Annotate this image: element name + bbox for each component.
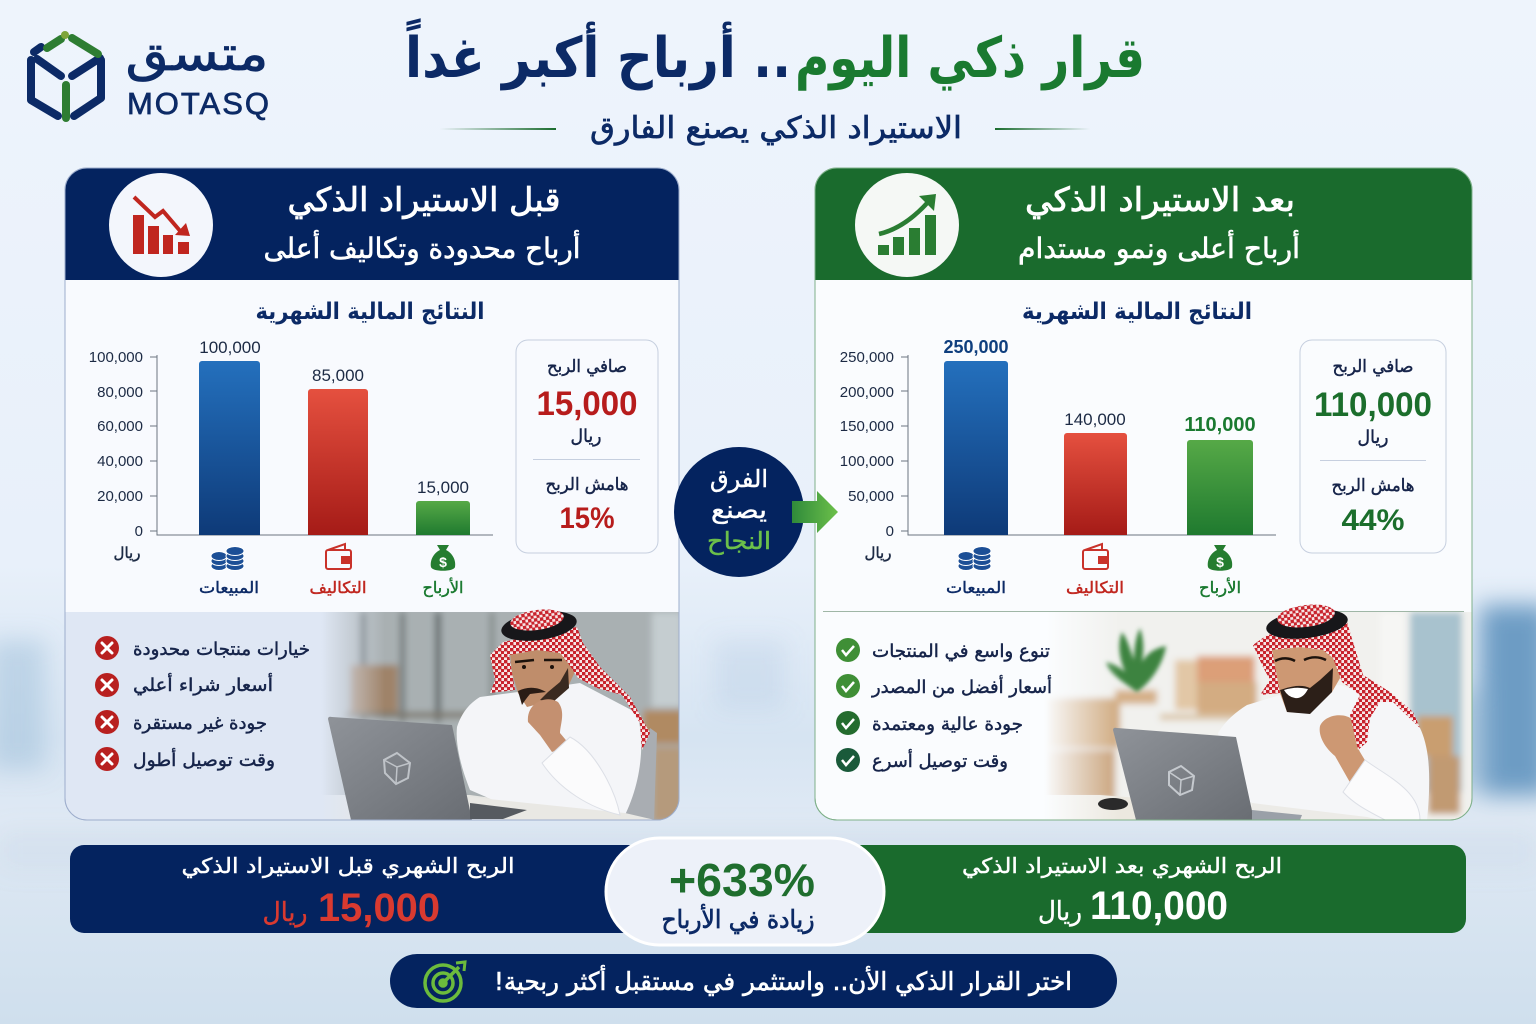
bar chart: before: 85,000 (312, 366, 364, 385)
bar chart: before: 100,000 (89, 349, 143, 366)
bar chart: before: التكاليف (310, 578, 366, 597)
callout: difference makes success (674, 447, 804, 577)
icon: money bag (431, 545, 455, 571)
item (95, 747, 275, 771)
item (836, 748, 1008, 772)
chart heading: النتائج المالية الشهرية (256, 299, 484, 325)
item: خيارات منتجات محدودة (133, 639, 310, 660)
icon: money bag (1208, 545, 1232, 571)
item (836, 711, 1023, 735)
logo (31, 26, 269, 121)
bar chart: after: 100,000 (840, 453, 894, 470)
header subtitle: أرباح أعلى ونمو مستدام (1018, 229, 1300, 265)
metric card: after: 44% (1342, 504, 1404, 537)
callout: profit increase: زيادة في الأرباح (662, 903, 814, 934)
metric card: before: ريال (570, 426, 602, 447)
chart heading: النتائج المالية الشهرية (1022, 299, 1252, 325)
callout: difference makes success: يصنع (711, 496, 767, 524)
logo wordmark arabic: متسق (126, 26, 268, 82)
bar chart: after: 150,000 (840, 418, 894, 435)
icon: money bag: $ (439, 554, 447, 570)
bar chart: before: 60,000 (97, 418, 143, 435)
bar chart: after: 50,000 (848, 488, 894, 505)
bar chart: after (840, 337, 1276, 598)
callout: difference makes success: الفرق (710, 465, 768, 493)
metric card: after: ريال (1358, 427, 1388, 448)
bar chart: after: 140,000 (1064, 410, 1126, 429)
panel: before (65, 168, 685, 826)
icon: wallet (1083, 544, 1108, 569)
bar chart: before: 40,000 (97, 453, 143, 470)
bar chart: after: ريال (865, 544, 891, 562)
icon: wallet (326, 544, 351, 569)
icon: cube logo (31, 31, 101, 118)
bar chart: after: المبيعات (946, 578, 1006, 597)
callout: profit increase: +633% (669, 854, 815, 906)
bottom bar: profit after: الربح الشهري بعد الاستيراد الذكي (962, 854, 1282, 878)
item (95, 673, 273, 697)
bar chart: before: 15,000 (417, 478, 469, 497)
item: جودة غير مستقرة (133, 713, 267, 734)
metric card: before: 15% (560, 502, 614, 535)
bottom bar: profit after: 110,000 (1090, 884, 1228, 928)
item: تنوع واسع في المنتجات (872, 641, 1050, 662)
bar chart: after: الأرباح (1199, 577, 1241, 598)
callout: difference makes success: النجاح (707, 527, 771, 555)
metric card: after: صافي الربح (1332, 357, 1414, 377)
bar chart: after: 250,000 (943, 337, 1009, 357)
panel bottom: office backdrop (65, 606, 685, 826)
header title: قبل الاستيراد الذكي (288, 180, 560, 219)
icon: coins (958, 546, 991, 570)
bar chart: before: الأرباح (422, 577, 464, 598)
bar chart: after: 250,000 (840, 349, 894, 366)
subtitle: الاستيراد الذكي يصنع الفارق (590, 111, 962, 146)
bar chart: before: 100,000 (199, 338, 261, 357)
bottom bar: profit before: 15,000 (318, 886, 440, 930)
title (405, 18, 1145, 91)
logo wordmark latin: MOTASQ (127, 86, 269, 121)
metric card: before: صافي الربح (547, 357, 627, 377)
icon: money bag: $ (1216, 554, 1224, 570)
item: جودة عالية ومعتمدة (872, 714, 1023, 735)
item: وقت توصيل أطول (133, 748, 275, 771)
call to action text: اختر القرار الذكي الأن.. واستثمر في مستقبل أكثر ربحية! (494, 964, 1072, 997)
item: أسعار شراء أعلي (133, 673, 273, 696)
metric card: after: هامش الربح (1332, 476, 1414, 496)
bar chart: after: 0 (886, 523, 894, 540)
metric card: after (1300, 340, 1446, 553)
arrow (792, 491, 838, 533)
metric card: before (516, 340, 658, 553)
metric card: after: 110,000 (1314, 386, 1432, 424)
title: .. أرباح أكبر غداً (405, 18, 791, 91)
icon: rising chart (855, 173, 959, 277)
list: problems (95, 636, 310, 771)
bar chart: after: التكاليف (1066, 578, 1124, 597)
bar chart: before: المبيعات (199, 578, 259, 597)
bar chart: after: 200,000 (840, 384, 894, 401)
metric card: before: هامش الربح (546, 475, 628, 495)
bottom bar: profit before (70, 845, 650, 933)
panel header: before (65, 168, 679, 280)
bar chart: after: 110,000 (1184, 414, 1256, 436)
bar chart: before: ريال (114, 544, 140, 562)
icon: target (425, 962, 465, 1001)
bottom bar: profit after: ريال (1038, 897, 1082, 927)
bottom bar: profit before: الربح الشهري قبل الاستيراد الذكي (182, 854, 514, 878)
icon: falling chart (109, 173, 213, 277)
bar chart: before: 0 (135, 523, 143, 540)
panel bottom: warehouse backdrop (1049, 612, 1472, 820)
photo: worried man at laptop (328, 606, 657, 820)
bar chart: before: 20,000 (97, 488, 143, 505)
bar chart: before: 80,000 (97, 384, 143, 401)
metric card: before: 15,000 (536, 385, 638, 423)
bottom bar: profit after (840, 845, 1466, 933)
item: وقت توصيل أسرع (872, 749, 1008, 772)
list: benefits (836, 638, 1052, 772)
call to action (390, 954, 1117, 1008)
panel header: after (815, 168, 1472, 280)
bottom bar: profit before: ريال (262, 898, 308, 928)
callout: profit increase (606, 838, 884, 945)
item (95, 710, 267, 734)
item: أسعار أفضل من المصدر (871, 675, 1052, 698)
photo: happy man at laptop (1098, 602, 1429, 820)
header subtitle: أرباح محدودة وتكاليف أعلى (264, 229, 580, 265)
icon: coins (211, 546, 244, 570)
bar chart: before (89, 338, 493, 598)
header title: بعد الاستيراد الذكي (1025, 180, 1295, 219)
title: قرار ذكي اليوم (795, 26, 1145, 91)
panel: after (815, 168, 1480, 826)
